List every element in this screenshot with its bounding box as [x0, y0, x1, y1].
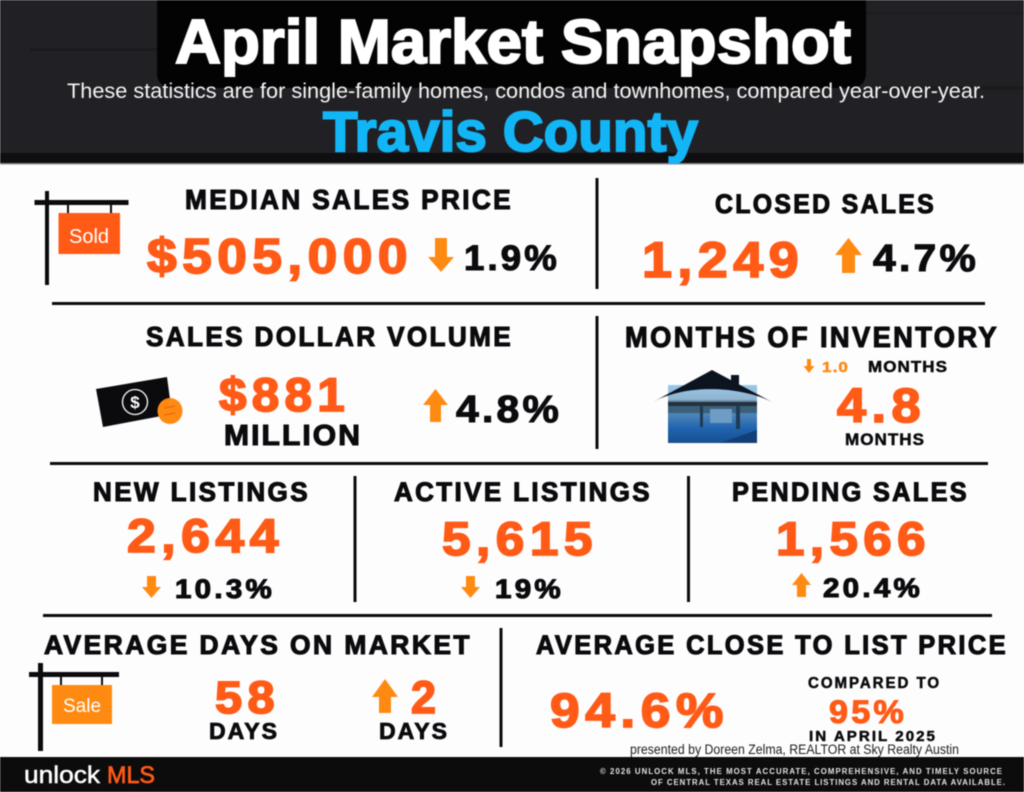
panel: average days on market	[29, 630, 472, 751]
icon: cash and coin: $	[130, 393, 140, 412]
unit: DAYS	[209, 718, 279, 744]
panel: average close to list price	[536, 630, 1008, 745]
icon: down arrow	[142, 576, 161, 598]
panel: new listings	[93, 477, 310, 604]
copyright: © 2026 UNLOCK MLS, THE MOST ACCURATE, COMPREHENSIVE, AND TIMELY SOURCE	[600, 767, 1002, 776]
icon: up arrow	[835, 238, 862, 273]
change: 10.3%	[175, 574, 275, 604]
change: 20.4%	[823, 573, 923, 603]
comparison value: 95%	[829, 694, 907, 730]
logo: MLS	[107, 762, 155, 789]
change: 19%	[495, 574, 564, 604]
footer band	[0, 757, 1024, 792]
header band	[0, 0, 1024, 164]
icon: sold sign: Sold	[69, 226, 109, 248]
heading: MONTHS OF INVENTORY	[625, 322, 999, 354]
value: 1,566	[776, 512, 931, 565]
logo: unlock	[24, 762, 101, 789]
icon: up arrow	[423, 389, 448, 422]
heading: SALES DOLLAR VOLUME	[146, 321, 513, 352]
copyright	[600, 767, 1005, 787]
icon: down arrow	[461, 576, 480, 598]
title panel	[157, 0, 866, 88]
change: 4.8%	[456, 389, 562, 431]
panel: closed sales	[642, 189, 979, 288]
heading: MEDIAN SALES PRICE	[185, 184, 513, 215]
copyright: OF CENTRAL TEXAS REAL ESTATE LISTINGS AND RENTAL DATA AVAILABLE.	[651, 778, 1005, 787]
unit: MILLION	[224, 420, 362, 452]
unit: MONTHS	[845, 430, 925, 449]
icon: sale sign: Sale	[63, 696, 101, 717]
comparison date: IN APRIL 2025	[809, 728, 937, 745]
panel: months of inventory	[625, 322, 999, 449]
heading: PENDING SALES	[732, 477, 969, 507]
change unit: MONTHS	[868, 359, 948, 376]
value: 5,615	[442, 512, 598, 565]
change: 1.9%	[464, 239, 560, 278]
icon: house photo	[653, 370, 772, 443]
change: 4.7%	[873, 238, 979, 280]
panel: sales dollar volume	[96, 321, 562, 452]
value: 58	[215, 672, 280, 723]
panel: active listings	[394, 477, 652, 604]
icon: down arrow	[428, 238, 454, 272]
panel: median sales price	[34, 184, 560, 285]
value: 4.8	[837, 380, 926, 433]
icon: sold sign	[34, 191, 128, 285]
change: 2	[411, 672, 436, 723]
title: April Market Snapshot	[175, 8, 851, 77]
value: $881	[219, 368, 350, 421]
icon: up arrow	[372, 679, 398, 713]
subtitle: These statistics are for single-family homes, condos and townhomes, compared year-over-year.	[67, 80, 985, 103]
panel: pending sales	[732, 477, 969, 603]
heading: NEW LISTINGS	[93, 477, 310, 507]
heading: ACTIVE LISTINGS	[394, 477, 652, 507]
icon: cash and coin	[96, 377, 182, 427]
icon: small down arrow	[804, 359, 814, 373]
value: $505,000	[147, 230, 413, 284]
presenter credit: presented by Doreen Zelma, REALTOR at Sky Realty Austin	[630, 742, 959, 757]
heading: CLOSED SALES	[715, 189, 936, 219]
comparison label: COMPARED TO	[808, 675, 941, 692]
change unit: DAYS	[379, 718, 449, 744]
county name: Travis County	[323, 100, 698, 164]
change: 1.0	[822, 359, 849, 376]
icon: up arrow	[792, 573, 811, 597]
value: 1,249	[642, 232, 804, 288]
icon: sale sign	[29, 663, 119, 751]
heading: AVERAGE DAYS ON MARKET	[44, 630, 472, 660]
heading: AVERAGE CLOSE TO LIST PRICE	[536, 630, 1008, 660]
value: 2,644	[127, 509, 284, 562]
value: 94.6%	[550, 685, 729, 738]
